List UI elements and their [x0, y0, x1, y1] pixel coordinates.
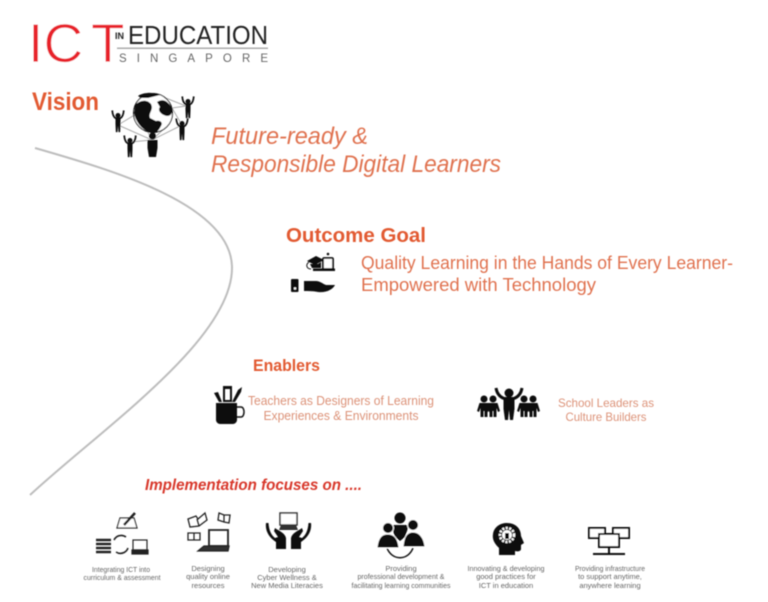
icon: professional community [377, 512, 425, 558]
outcome goal statement [361, 253, 733, 295]
caption: innovating practices: good practices for [476, 572, 536, 581]
caption: innovating practices [468, 564, 544, 590]
logo: ICT in Education Singapore [28, 12, 268, 74]
caption: infrastructure [575, 564, 645, 590]
icon: hands cradling laptop [266, 513, 311, 549]
caption: professional development: facilitating learning communities [352, 581, 451, 590]
icon: hand holding graduation cap and laptop [291, 253, 335, 292]
icon: books, cycle, laptop and tablet [96, 513, 148, 554]
caption: cyber wellness: Developing [268, 565, 306, 574]
caption: professional development: professional development & [358, 572, 444, 581]
logo: ICT in Education Singapore: EDUCATION [128, 20, 268, 50]
caption: cyber wellness: New Media Literacies [251, 581, 323, 590]
caption: innovating practices: Innovating & developing [468, 564, 544, 573]
logo: ICT in Education Singapore: SINGAPORE [119, 53, 268, 65]
caption: designing resources: quality online [186, 572, 230, 581]
enabler: school leaders [558, 396, 654, 424]
caption: cyber wellness: Cyber Wellness & [257, 573, 317, 582]
caption: infrastructure: Providing infrastructure [575, 564, 645, 573]
enabler: school leaders: School Leaders as [558, 396, 654, 410]
caption: innovating practices: ICT in education [479, 581, 533, 590]
vision statement: Responsible Digital Learners [211, 151, 501, 178]
caption: infrastructure: to support anytime, [578, 572, 642, 581]
caption: integrating ICT: curriculum & assessment [84, 573, 161, 582]
logo: ICT in Education Singapore: IN [115, 31, 124, 41]
icon: globe with connected people [112, 93, 194, 157]
vision statement: Future-ready & [211, 123, 368, 150]
icon: head with lightbulb gear [493, 523, 524, 555]
caption: professional development: Providing [385, 564, 417, 573]
enabler: teachers: Experiences & Environments [264, 408, 419, 423]
caption: designing resources: resources [192, 581, 225, 590]
caption: designing resources [186, 564, 230, 590]
vision statement [211, 123, 501, 178]
icon: mug with pencils [214, 386, 244, 424]
caption: cyber wellness [251, 565, 323, 590]
icon: books and laptop [188, 513, 230, 551]
enabler: school leaders: Culture Builders [566, 410, 646, 424]
caption: integrating ICT: Integrating ICT into [92, 565, 150, 574]
curve: pathway line [30, 148, 232, 495]
caption: integrating ICT [84, 565, 161, 582]
logo: ICT in Education Singapore: ICT [28, 12, 125, 74]
caption: designing resources: Designing [191, 564, 225, 573]
icon: school leader with group [477, 388, 540, 420]
enabler: teachers: Teachers as Designers of Learning [248, 393, 434, 408]
outcome goal statement: Empowered with Technology [361, 275, 596, 295]
heading: Vision: Vision [32, 88, 99, 116]
icon: networked computers [589, 528, 629, 554]
heading: Outcome Goal: Outcome Goal [286, 225, 426, 247]
caption: infrastructure: anywhere learning [579, 581, 641, 590]
heading: Enablers: Enablers [253, 356, 320, 375]
heading: Implementation focuses on: Implementation focuses on .... [145, 477, 362, 494]
enabler: teachers [248, 393, 434, 423]
caption: professional development [352, 564, 451, 590]
outcome goal statement: Quality Learning in the Hands of Every Learner- [361, 253, 733, 273]
